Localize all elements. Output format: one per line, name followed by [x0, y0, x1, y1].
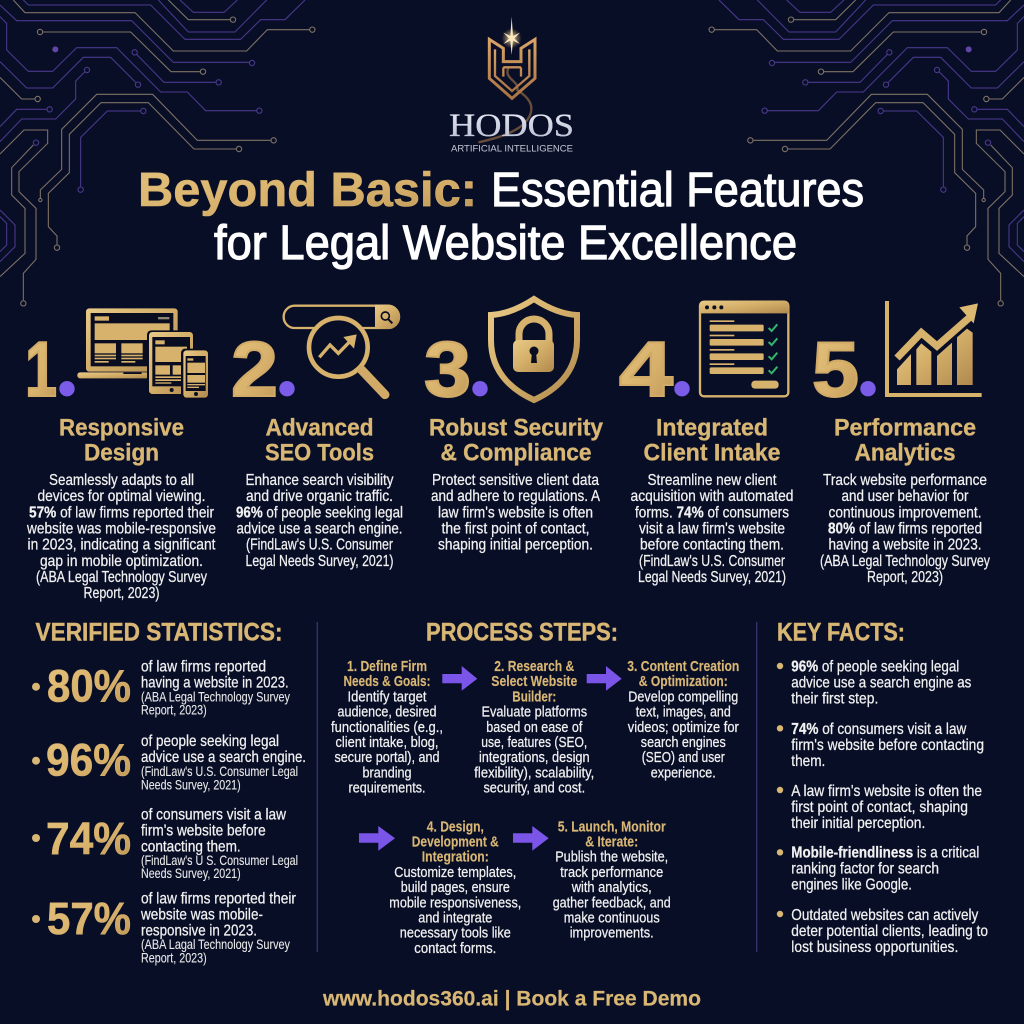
step 4 [389, 818, 521, 957]
heading: SEO Tools [265, 440, 374, 467]
description: visit a law firm's website [639, 520, 785, 538]
title: Beyond Basic: [138, 164, 477, 217]
description [26, 472, 216, 602]
step 2: flexibility), scalability, [474, 764, 594, 781]
heading: Analytics [854, 440, 956, 467]
stat: 74%: of consumers visit a law [141, 806, 286, 823]
description: Report, 2023) [867, 569, 943, 586]
step 3: search engines [641, 734, 726, 751]
fact: search engine: 96% of people seeking legal [791, 659, 959, 676]
description: Report, 2023) [84, 585, 160, 602]
stat: 80%: of law firms reported [141, 659, 266, 676]
step 1: requirements. [348, 780, 426, 797]
description: 96% of people seeking legal [236, 504, 403, 521]
stat: 74%: 74% [46, 813, 131, 864]
description: and user behavior for [842, 488, 969, 505]
stat: 57%: website was mobile- [140, 906, 263, 923]
stat: 74%: firm's website before [141, 822, 266, 839]
description: 80% of law firms reported [828, 520, 982, 538]
step 2: 2. Research & [494, 658, 574, 675]
heading: Integrated [656, 415, 768, 442]
fact: consumers visit: them. [791, 753, 825, 770]
description: devices for optimal viewing. [38, 488, 206, 505]
step 2: based on ease of [486, 719, 583, 736]
step 5 [553, 818, 671, 942]
step 2: use, features (SEO, [481, 734, 587, 751]
title [138, 164, 864, 270]
icon: growth bar chart [887, 301, 982, 395]
title: Essential Features [491, 164, 864, 217]
description [236, 472, 403, 570]
number dot [472, 381, 488, 396]
stat: 74%: contacting them. [141, 838, 241, 855]
description: Track website performance [823, 472, 987, 489]
heading: Advanced [266, 415, 374, 442]
fact: first point of contact [777, 783, 982, 832]
fact: mobile-friendliness: ranking factor for search [791, 861, 939, 878]
heading: Client Intake [644, 440, 780, 467]
stat: 74% [32, 806, 298, 881]
description: in 2023, indicating a significant [28, 537, 216, 554]
description: forms. 74% of consumers [635, 504, 789, 521]
title: for Legal Website Excellence [214, 217, 797, 270]
heading: Robust Security [429, 415, 604, 442]
description [431, 472, 600, 554]
description: and adhere to regulations. A [431, 488, 600, 505]
step 2: Select Website [491, 673, 577, 690]
number 2: 2 [231, 325, 278, 413]
heading [429, 415, 604, 467]
step 2: integrations, design [479, 749, 590, 766]
step 5: make continuous [564, 910, 660, 926]
step 1: 1. Define Firm [347, 658, 427, 675]
description: (FindLaw's U.S. Consumer [246, 537, 394, 554]
logo tagline: ARTIFICIAL INTELLIGENCE [451, 144, 573, 154]
step 3: 3. Content Creation [627, 658, 739, 675]
description: (ABA Legal Technology Survey [36, 569, 207, 586]
fact: search engine [777, 659, 971, 708]
step 4: 4. Design, [427, 818, 484, 835]
step 5: Publish the website, [555, 849, 668, 866]
number dot [674, 381, 690, 396]
stat: 80%: 80% [47, 661, 131, 712]
step 4: build pages, ensure [401, 879, 510, 896]
description: Streamline new client [648, 472, 777, 489]
icon: responsive devices [77, 308, 210, 399]
number 5: 5 [812, 325, 859, 413]
icon: shield with padlock [491, 299, 577, 400]
step 1: client intake, blog, [336, 734, 438, 751]
description [630, 472, 794, 586]
step 1: audience, desired [338, 704, 436, 721]
step 5: track performance [560, 864, 663, 881]
step 3: (SEO) and user [642, 749, 725, 766]
heading: Design [84, 440, 159, 467]
number dot [860, 381, 876, 396]
step 4: contact forms. [414, 940, 496, 957]
panel: feature 4 integrated client intake [619, 301, 794, 586]
stat: 57%: Report, 2023) [141, 949, 207, 965]
fact: first point of contact: their initial perception. [791, 815, 925, 832]
fact: consumers visit: firm's website before contacting [791, 737, 984, 754]
description: (FindLaw's U.S. Consumer [639, 553, 786, 570]
logo wordmark: HODOS [449, 108, 574, 144]
heading: process steps: PROCESS STEPS: [426, 619, 618, 647]
stat: 80%: having a website in 2023. [141, 674, 289, 691]
fact: outdated websites: Outdated websites can actively [791, 907, 978, 924]
stat: 80%: (ABA Legal Technology Survey [141, 688, 290, 704]
fact: first point of contact: first point of contact, shaping [791, 799, 968, 816]
description: website was mobile-responsive [26, 520, 216, 538]
stat: 96%: of people seeking legal [141, 733, 279, 750]
step 3 [627, 658, 739, 781]
step 4: Customize templates, [394, 864, 516, 881]
step 2: Builder: [512, 688, 556, 705]
description: Legal Needs Survey, 2021) [638, 569, 786, 586]
description: shaping initial perception. [438, 537, 593, 554]
step 1: secure portal), and [334, 749, 440, 766]
fact: outdated websites [777, 907, 988, 956]
stat: 57%: (ABA Lagal Technology Survey [141, 936, 290, 952]
panel: verified statistics [32, 619, 306, 965]
arrow: into step 4 [359, 826, 395, 851]
step 1: branding [362, 764, 412, 781]
step 5: gather feedback, and [553, 894, 671, 911]
panel: feature 3 robust security and compliance [424, 299, 604, 554]
description: continuous improvement. [828, 504, 982, 521]
fact: first point of contact: A law firm's website is often the [791, 783, 982, 800]
step 1: Needs & Goals: [344, 673, 430, 690]
stat: 57%: of law firms reported their [141, 890, 297, 907]
step 5: improvements. [570, 925, 654, 942]
step 2 [474, 658, 594, 797]
icon: search bar and magnifier [284, 305, 400, 395]
description: Seamlessly adapts to all [49, 472, 194, 489]
heading [644, 415, 780, 467]
step 2: security, and cost. [483, 780, 585, 797]
description: acquisition with automated [630, 488, 794, 505]
fact: outdated websites: deter potential clients, leading to [791, 923, 988, 940]
stat: 74%: Needs Survey, 2021) [141, 865, 241, 881]
fact: mobile-friendliness: engines like Google. [791, 877, 912, 894]
panel: feature 5 performance analytics [812, 301, 990, 586]
fact: outdated websites: lost business opportunities. [791, 939, 958, 956]
stat: 80%: Report, 2023) [141, 702, 207, 718]
arrow: step 2 to 3 [587, 666, 622, 691]
description: the first point of contact, [442, 520, 590, 538]
description: 57% of law firms reported their [29, 504, 215, 521]
step 4: mobile responsiveness, [389, 894, 521, 911]
step 3: Develop compelling [628, 688, 738, 705]
fact: consumers visit: 74% of consumers visit a law [791, 721, 967, 738]
stat: 96%: advice use a search engine. [141, 749, 306, 766]
number 4: 4 [619, 325, 673, 413]
heading: verified statistics: VERIFIED STATISTICS: [36, 619, 282, 647]
number 1: 1 [25, 325, 57, 413]
heading: & Compliance [440, 440, 592, 467]
stat: 96%: 96% [46, 735, 131, 786]
stat: 80% [32, 659, 290, 718]
stat: 96%: Needs Survey, 2021) [141, 776, 241, 792]
description: before contacting them. [640, 537, 784, 554]
step 5: 5. Launch, Monitor [558, 818, 666, 835]
step 5: & Iterate: [585, 834, 638, 850]
stat: 57%: 57% [47, 893, 131, 944]
panel: feature 1 responsive design [25, 308, 216, 602]
step 4: Integration: [422, 849, 489, 866]
arrow: step 1 to 2 [442, 666, 477, 691]
stat: 96%: (FindLaw's U.S. Consumer Legal [141, 763, 298, 779]
icon: intake form checklist [699, 301, 789, 396]
heading [59, 415, 184, 467]
step 3: experience. [651, 764, 716, 781]
stat: 57% [32, 890, 297, 965]
arrow: step 4 to 5 [513, 826, 549, 851]
step 5: with analytics, [571, 879, 652, 896]
fact: mobile-friendliness [777, 845, 979, 894]
step 1: functionalities (e.g., [331, 719, 443, 736]
fact: search engine: advice use a search engine as [791, 675, 971, 692]
heading: key facts: KEY FACTS: [777, 619, 905, 647]
stat: 57%: responsive in 2023. [141, 922, 257, 939]
description: advice use a search engine. [236, 520, 402, 538]
heading [265, 415, 374, 467]
heading [834, 415, 976, 467]
heading: Responsive [59, 415, 184, 442]
number 3: 3 [424, 325, 471, 413]
panel: process steps [331, 619, 739, 957]
step 2: Evaluate platforms [481, 704, 587, 721]
description: Enhance search visibility [246, 472, 394, 489]
stat: 74%: (FindLaw's U S. Consumer Legal [141, 852, 298, 868]
step 1 [331, 658, 443, 797]
heading: Performance [834, 415, 976, 442]
panel: key facts [777, 619, 988, 956]
description: gap in mobile optimization. [40, 553, 203, 570]
step 4: necessary tools like [400, 925, 511, 942]
logo: Hodos Artificial Intelligence [449, 17, 574, 155]
icon: logo shield and star [478, 17, 535, 142]
fact: search engine: their first step. [791, 691, 878, 708]
description [820, 472, 990, 586]
step 4: and integrate [418, 910, 492, 926]
panel: feature 2 advanced SEO tools [231, 305, 403, 570]
fact: mobile-friendliness: Mobile-friendliness is a critical [791, 845, 979, 862]
description: having a website in 2023. [828, 537, 982, 554]
number dot [279, 381, 295, 396]
number dot [59, 381, 75, 396]
step 4: Development & [412, 834, 499, 850]
step 3: text, images, and [636, 704, 731, 721]
fact: consumers visit [777, 721, 984, 770]
step 3: videos; optimize for [628, 719, 739, 736]
step 3: & Optimization: [639, 673, 728, 690]
step 1: Identify target [348, 688, 427, 705]
description: Legal Needs Survey, 2021) [246, 553, 394, 570]
description: Protect sensitive client data [432, 472, 599, 489]
description: and drive organic traffic. [246, 488, 393, 505]
stat: 96% [32, 733, 306, 792]
description: law firm's website is often [438, 504, 593, 521]
footer call to action: www.hodos360.ai | Book a Free Demo [322, 988, 701, 1010]
